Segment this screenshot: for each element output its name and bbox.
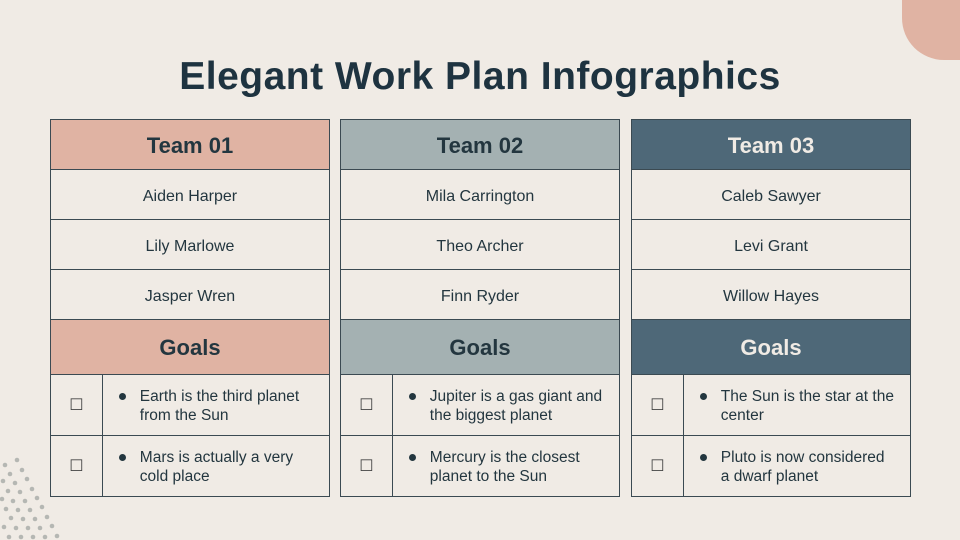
goal 1: ☐ — [69, 397, 84, 414]
goal 1: from the Sun — [140, 407, 229, 424]
goals header — [340, 319, 620, 375]
name: Willow Hayes: Willow Hayes — [723, 288, 819, 305]
name: Lily Marlowe — [50, 219, 330, 270]
name: Finn Ryder: Finn Ryder — [441, 288, 519, 305]
goal 1: center — [721, 407, 764, 424]
goal 2: ☐ — [69, 458, 84, 475]
panel: team 01 — [50, 119, 330, 497]
goal 1: Jupiter is a gas giant and — [430, 388, 602, 405]
goals header — [50, 319, 330, 375]
goals header: Goals — [449, 335, 511, 360]
name: Aiden Harper: Aiden Harper — [143, 188, 237, 205]
header: team 01: Team 01 — [147, 132, 233, 158]
goal 2 — [631, 435, 911, 497]
panel: team 03 — [631, 119, 911, 497]
goal 2 — [340, 435, 620, 497]
name: Jasper Wren — [50, 269, 330, 320]
name: Mila Carrington — [340, 169, 620, 220]
goal 2: a dwarf planet — [721, 468, 818, 485]
name: Theo Archer: Theo Archer — [436, 238, 524, 255]
name: Mila Carrington: Mila Carrington — [426, 188, 534, 205]
name: Aiden Harper — [50, 169, 330, 220]
goal 2: Mars is actually a very — [140, 449, 293, 466]
goal 2: cold place — [140, 468, 210, 485]
goals header: Goals — [740, 335, 802, 360]
header: team 03: Team 03 — [728, 132, 814, 158]
name: Finn Ryder — [340, 269, 620, 320]
decoration: dot pattern — [0, 458, 60, 540]
goal 2: ☐ — [359, 458, 374, 475]
goals header — [631, 319, 911, 375]
goals header: Goals — [159, 335, 221, 360]
header: team 02 — [340, 119, 620, 170]
header: team 02: Team 02 — [437, 132, 523, 158]
goal 2: Mercury is the closest — [430, 449, 580, 466]
name: Jasper Wren: Jasper Wren — [145, 288, 235, 305]
panel: team 02 — [340, 119, 620, 497]
goal 1 — [50, 374, 330, 436]
goal 1 — [631, 374, 911, 436]
decoration: corner shape — [902, 0, 960, 60]
goal 1: The Sun is the star at the — [721, 388, 894, 405]
goal 1: ☐ — [359, 397, 374, 414]
header: team 01 — [50, 119, 330, 170]
goal 1: the biggest planet — [430, 407, 552, 424]
header: team 03 — [631, 119, 911, 170]
name: Levi Grant: Levi Grant — [734, 238, 808, 255]
goal 1 — [340, 374, 620, 436]
goal 2: Pluto is now considered — [721, 449, 884, 466]
name: Levi Grant — [631, 219, 911, 270]
goal 1: Earth is the third planet — [140, 388, 299, 405]
title: Elegant Work Plan Infographics — [179, 55, 781, 98]
goal 2 — [50, 435, 330, 497]
goal 2: ☐ — [650, 458, 665, 475]
name: Caleb Sawyer: Caleb Sawyer — [721, 188, 821, 205]
name: Caleb Sawyer — [631, 169, 911, 220]
goal 2: planet to the Sun — [430, 468, 547, 485]
name: Lily Marlowe: Lily Marlowe — [146, 238, 234, 255]
goal 1: ☐ — [650, 397, 665, 414]
name: Theo Archer — [340, 219, 620, 270]
name: Willow Hayes — [631, 269, 911, 320]
